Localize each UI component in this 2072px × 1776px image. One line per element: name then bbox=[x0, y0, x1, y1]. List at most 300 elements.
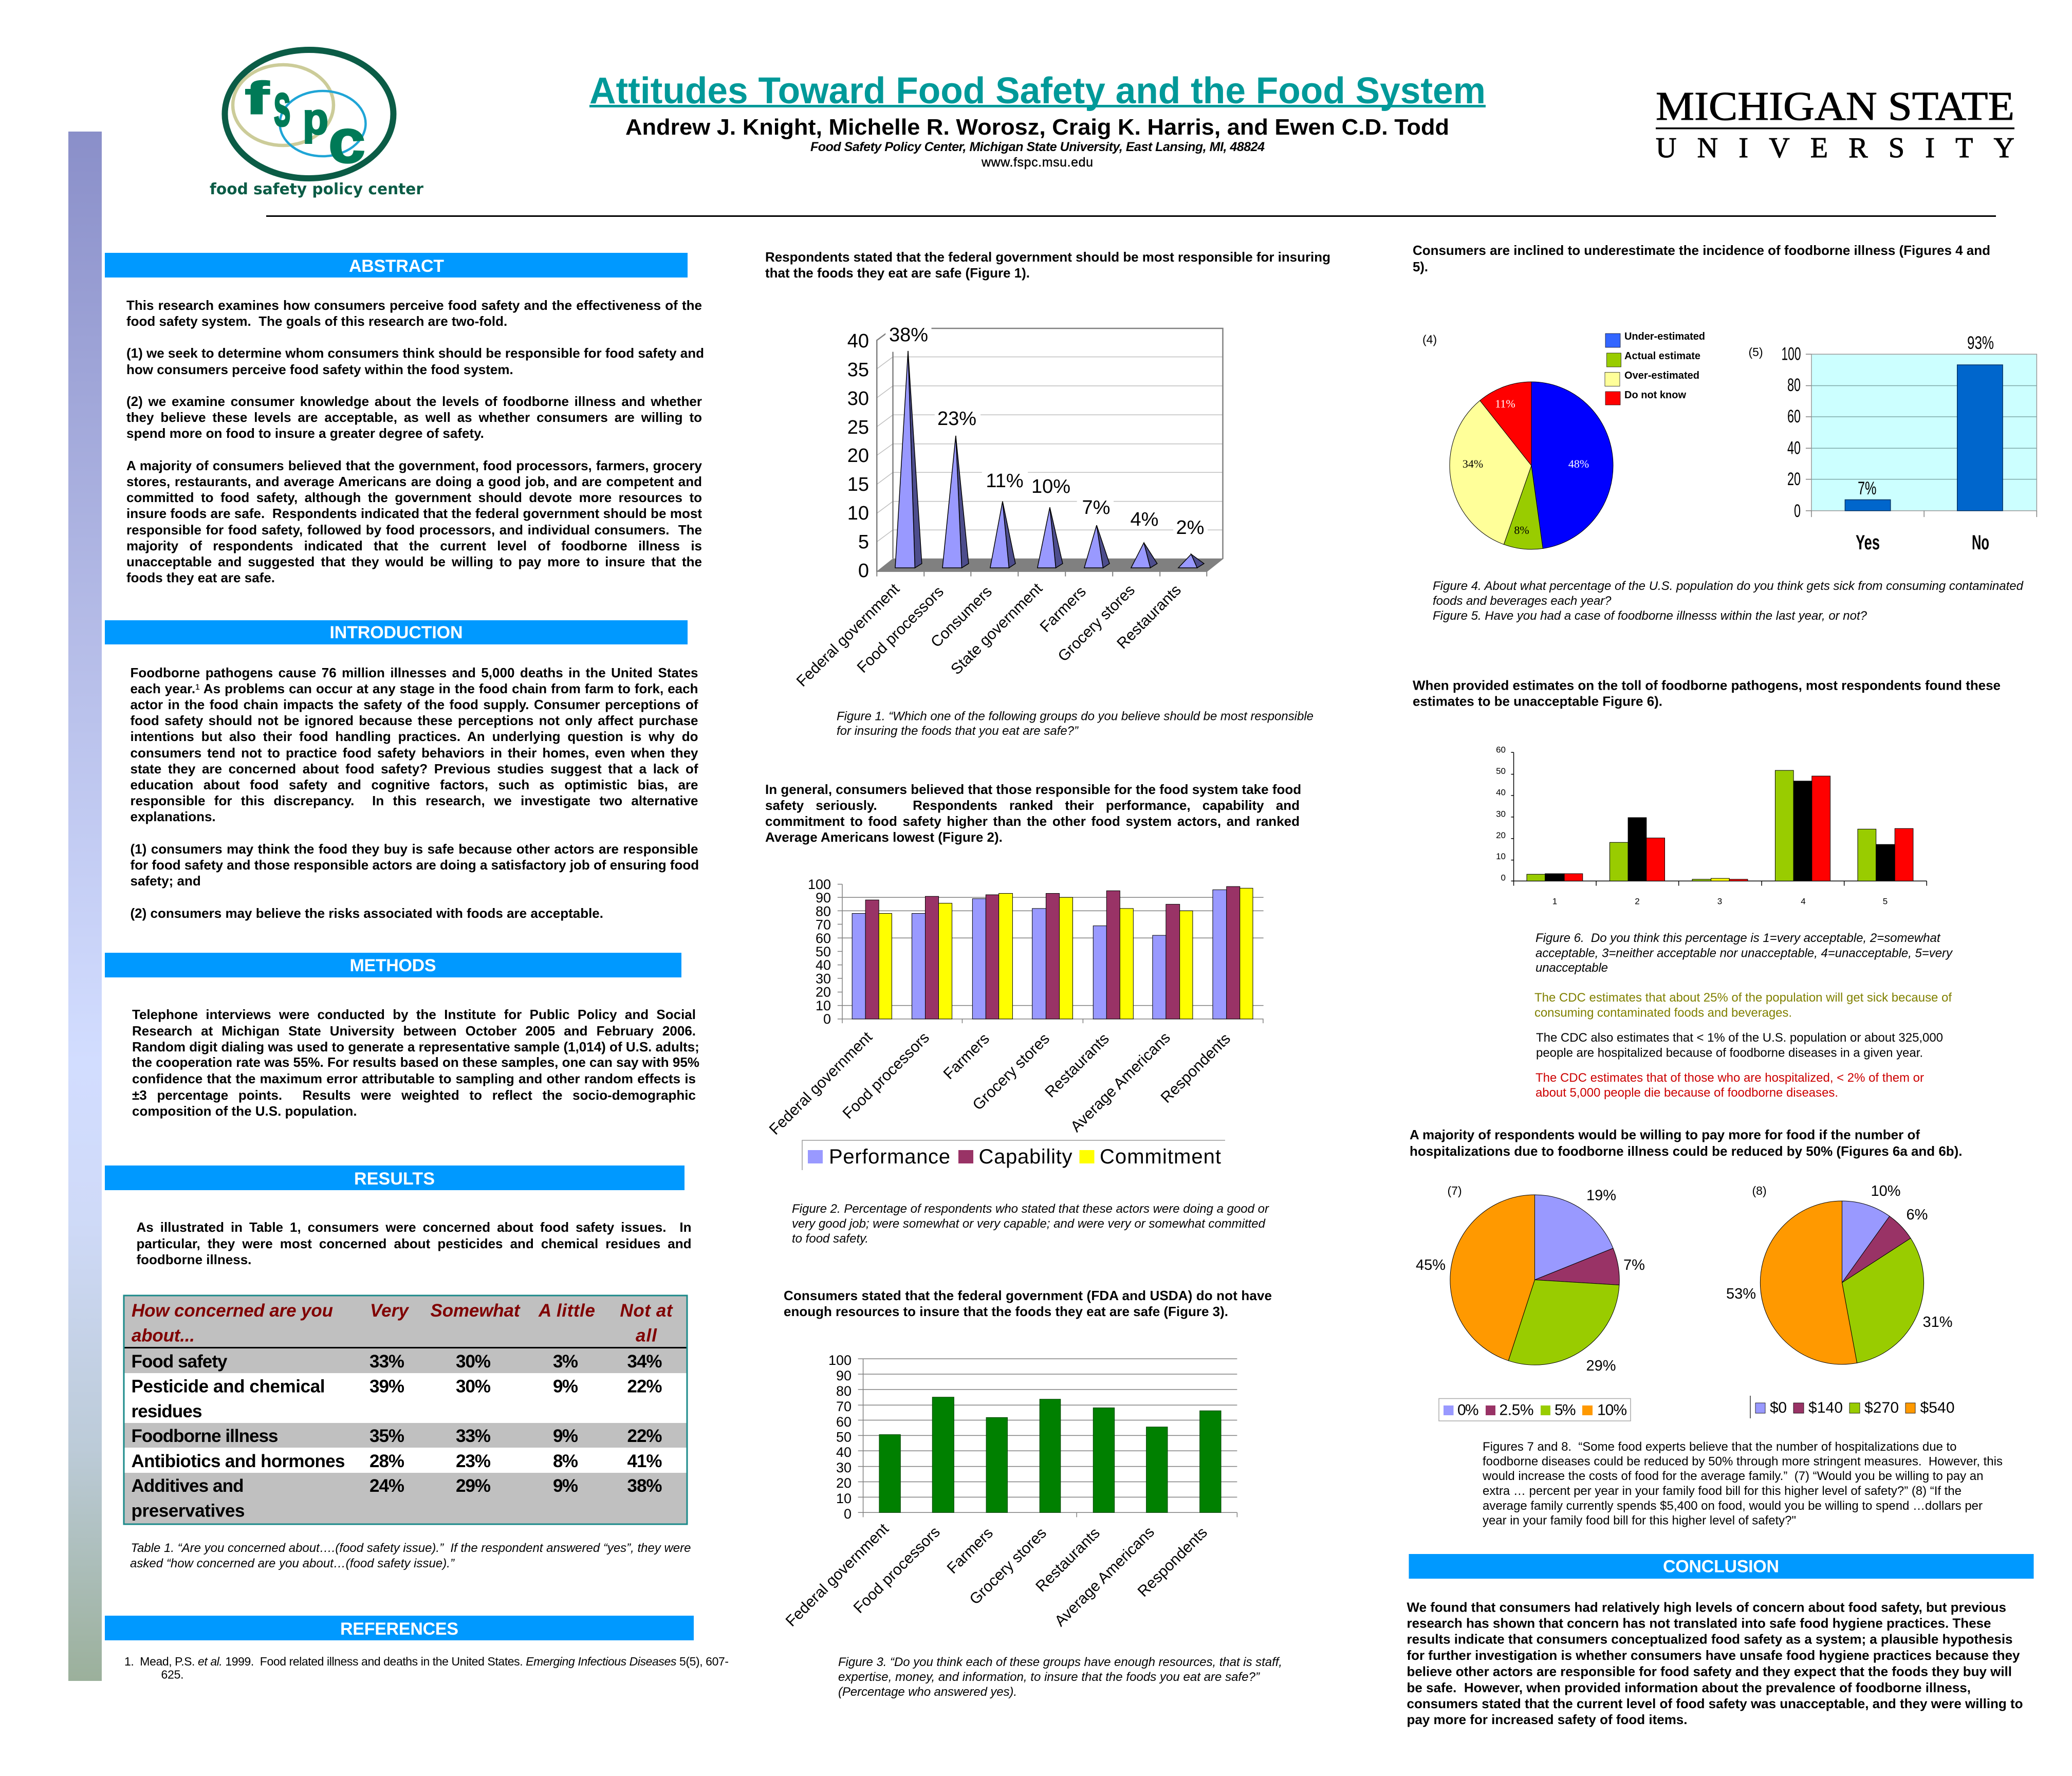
heading: introduction: INTRODUCTION bbox=[330, 623, 462, 642]
heading: figure 3 statement: Consumers stated that the federal government (FDA and USDA) do not have bbox=[784, 1288, 1272, 1303]
text block: abstract body: food safety system. The goals of this research are two-fold. bbox=[126, 313, 507, 329]
chart: figure 4 pie: 34% bbox=[1463, 457, 1483, 470]
chart: figure 4 pie bbox=[1422, 331, 1705, 549]
chart: figure 6 bars: 10 bbox=[1496, 852, 1506, 861]
text block: results intro: As illustrated in Table 1, consumers were concerned about food safety issues. In bbox=[137, 1219, 692, 1234]
legend: figure 8: $270 bbox=[1864, 1399, 1899, 1416]
heading: results: RESULTS bbox=[354, 1169, 435, 1189]
chart: figure 4 pie: 11% bbox=[1495, 397, 1515, 410]
table 1: 35% bbox=[369, 1426, 404, 1446]
caption: figure 3: expertise, money, and information, to insure that the foods you eat are safe?” bbox=[838, 1670, 1260, 1684]
text block: abstract body: (1) we seek to determine whom consumers think should be responsible for food safety and bbox=[126, 345, 704, 361]
text block: introduction body: explanations. bbox=[131, 809, 216, 824]
chart: figure 3 bars: Restaurants bbox=[1032, 1525, 1103, 1595]
table 1: Antibiotics and hormones bbox=[132, 1451, 345, 1471]
chart: figure 5 bars: No bbox=[1972, 531, 1989, 554]
chart: figure 1 pyramid chart: 5 bbox=[858, 531, 869, 553]
chart: figure 7 pie: 7% bbox=[1623, 1257, 1645, 1273]
chart: figure 8 pie: 6% bbox=[1907, 1207, 1928, 1223]
table 1: 33% bbox=[369, 1352, 404, 1372]
table 1: Food safety bbox=[132, 1352, 228, 1372]
text block: introduction body: education about food safety and cognitive factors, such as optimistic bias, are bbox=[131, 777, 698, 792]
text block: introduction body: (2) consumers may believe the risks associated with foods are acceptable. bbox=[131, 905, 603, 921]
legend: figure 8: $0 bbox=[1770, 1399, 1787, 1416]
chart: figure 2 grouped bars: 60 bbox=[816, 931, 831, 946]
text block: conclusion body: be safe. However, when provided information about the prevalence of foodborne illness, bbox=[1407, 1680, 1971, 1695]
table 1: 22% bbox=[627, 1376, 662, 1397]
legend: figure 7: 2.5% bbox=[1500, 1402, 1533, 1418]
text block: CDC estimates: people are hospitalized because of foodborne diseases in a given year. bbox=[1536, 1046, 1923, 1060]
chart: figure 3 bars: 100 bbox=[828, 1353, 852, 1368]
table 1: 24% bbox=[369, 1476, 404, 1496]
chart: figure 5 bars: 80 bbox=[1787, 375, 1801, 395]
chart: figure 3 bars: 70 bbox=[836, 1399, 852, 1414]
logo: food safety policy center bbox=[210, 50, 423, 198]
table 1: 38% bbox=[627, 1476, 662, 1496]
text block: results intro bbox=[137, 1219, 692, 1267]
chart: figure 2 grouped bars: 40 bbox=[816, 957, 831, 973]
table 1: 30% bbox=[456, 1352, 491, 1372]
title block: Attitudes Toward Food Safety and the Food System bbox=[589, 70, 1486, 112]
chart: figure 1 pyramid chart: 38% bbox=[889, 324, 928, 346]
caption: figures 7 and 8 bbox=[1482, 1440, 2003, 1527]
legend: figure 4: Do not know bbox=[1624, 390, 1686, 401]
heading: figures 4 and 5 statement bbox=[1413, 243, 1990, 274]
table 1: residues bbox=[132, 1401, 202, 1421]
table 1: 8% bbox=[553, 1451, 578, 1471]
heading: conclusion bbox=[1409, 1554, 2034, 1579]
heading: figure 1 statement bbox=[765, 249, 1330, 281]
chart: figure 6 bars: 60 bbox=[1496, 745, 1506, 754]
legend: figure 4: Over-estimated bbox=[1624, 370, 1699, 381]
legend: figure 4: Under-estimated bbox=[1624, 331, 1705, 342]
table 1: 33% bbox=[456, 1426, 491, 1446]
chart: figure 2 grouped bars: Respondents bbox=[1158, 1030, 1234, 1106]
chart: figure 5 bars: 93% bbox=[1967, 333, 1994, 353]
chart: figure 8 pie: (8) bbox=[1752, 1184, 1767, 1197]
text block: introduction body: food safety should not be ignored because these perceptions not only affect purchase bbox=[131, 712, 698, 728]
chart: figure 5 bars: 0 bbox=[1794, 501, 1801, 521]
text block: abstract body: how consumers perceive food safety within the food system. bbox=[126, 362, 513, 377]
heading: figure 6 statement bbox=[1413, 677, 2001, 709]
table 1: Pesticide and chemical bbox=[132, 1376, 325, 1397]
chart: figure 3 bars: 60 bbox=[836, 1414, 852, 1430]
table 1: 23% bbox=[456, 1451, 491, 1471]
table 1: Additives and bbox=[132, 1476, 244, 1496]
chart: figure 2 grouped bars: 90 bbox=[816, 890, 831, 905]
chart: figure 2 grouped bars bbox=[766, 877, 1264, 1170]
chart: figure 7 pie: (7) bbox=[1447, 1184, 1462, 1197]
table 1: 9% bbox=[553, 1426, 578, 1446]
chart: figure 2 grouped bars: 30 bbox=[816, 971, 831, 987]
chart: figure 5 bars: 60 bbox=[1787, 406, 1801, 427]
text block: abstract body: they believe these levels are acceptable, as well as whether consumers are willing to bbox=[126, 410, 702, 425]
caption: figures 7 and 8: average family currently spends $5,400 on food, would you be willing to spend …dollars per bbox=[1483, 1499, 1983, 1513]
text block: results intro: particular, they were most concerned about pesticides and chemical residues and bbox=[137, 1235, 692, 1251]
logo: food safety policy center: food safety policy center bbox=[210, 180, 423, 198]
chart: figure 1 pyramid chart: 0 bbox=[858, 560, 869, 582]
heading: abstract: ABSTRACT bbox=[349, 256, 444, 276]
chart: figure 3 bars: Food processors bbox=[850, 1524, 943, 1617]
caption: figure 2: very good job; were somewhat or very capable; and were very or somewhat committed bbox=[792, 1217, 1266, 1231]
chart: figure 6 bars: 4 bbox=[1801, 896, 1806, 906]
heading: figure 1 statement: Respondents stated that the federal government should be most responsible for insuring bbox=[765, 249, 1330, 265]
heading: figure 3 statement: enough resources to insure that the foods they eat are safe (Figure 3). bbox=[784, 1304, 1228, 1319]
text block: conclusion body bbox=[1407, 1599, 2023, 1727]
text block: CDC estimates: The CDC also estimates that < 1% of the U.S. population or about 325,000 bbox=[1536, 1031, 1943, 1045]
chart: figure 6 bars: 50 bbox=[1496, 766, 1506, 776]
logo: Michigan State University: MICHIGAN STATE bbox=[1656, 84, 2014, 129]
chart: figure 1 pyramid chart: 10% bbox=[1031, 476, 1070, 497]
heading: figures 4 and 5 statement: Consumers are inclined to underestimate the incidence of foodborne illness (Figures 4 and bbox=[1413, 243, 1990, 258]
title block bbox=[589, 70, 1486, 170]
heading: figure 3 statement bbox=[784, 1288, 1272, 1319]
chart: figure 6 bars: 2 bbox=[1635, 896, 1640, 906]
chart: figure 4 pie: (4) bbox=[1422, 333, 1437, 346]
heading: figure 2 statement: commitment to food safety higher than the other food system actors, and ranked bbox=[765, 813, 1300, 828]
chart: figure 6 bars bbox=[1496, 745, 1927, 906]
chart: figure 1 pyramid chart: 30 bbox=[847, 388, 869, 410]
text block: introduction body: Foodborne pathogens cause 76 million illnesses and 5,000 deaths in the United States bbox=[131, 665, 698, 680]
table 1 bbox=[124, 1296, 687, 1524]
chart: figure 3 bars: 10 bbox=[836, 1491, 852, 1506]
chart: figure 5 bars: Yes bbox=[1856, 531, 1880, 554]
text block: abstract body: insure foods are safe. Respondents indicated that the federal government should be most bbox=[126, 506, 702, 521]
chart: figure 6 bars: 5 bbox=[1883, 896, 1888, 906]
chart: figure 5 bars: 7% bbox=[1858, 478, 1877, 498]
table 1: A little bbox=[538, 1301, 595, 1321]
text block: introduction body: actor in the food chain impacts the safety of the food supply. Consumer perceptions of bbox=[131, 697, 698, 712]
decorative gradient sidebar bbox=[68, 132, 102, 1681]
chart: figure 2 grouped bars: Federal government bbox=[766, 1028, 876, 1138]
chart: figure 6 bars: 0 bbox=[1501, 873, 1506, 883]
chart: figure 1 pyramid chart: 4% bbox=[1131, 509, 1158, 530]
text block: conclusion body: for further investigation is whether consumers have unsafe food hygiene practices because they bbox=[1407, 1648, 2020, 1663]
text block: abstract body: A majority of consumers believed that the government, food processors, farmers, grocery bbox=[126, 457, 702, 473]
text block: abstract body: foods they eat are safe. bbox=[126, 569, 275, 585]
caption: figures 4 and 5: Figure 5. Have you had a case of foodborne illnesss within the last year, or not? bbox=[1433, 609, 1867, 623]
table 1: Not at bbox=[620, 1301, 673, 1321]
table 1: Foodborne illness bbox=[132, 1426, 279, 1446]
text block: CDC estimates bbox=[1534, 991, 1952, 1100]
chart: figure 4 pie: 48% bbox=[1568, 457, 1589, 470]
title block: Food Safety Policy Center, Michigan State University, East Lansing, MI, 48824 bbox=[810, 140, 1265, 154]
caption: figures 4 and 5: Figure 4. About what percentage of the U.S. population do you think gets sick from consuming contaminated bbox=[1433, 579, 2024, 593]
text block: methods body: Telephone interviews were conducted by the Institute for Public Policy and Social bbox=[132, 1007, 696, 1022]
chart: figure 1 pyramid chart: 23% bbox=[937, 408, 976, 430]
table 1: preservatives bbox=[132, 1501, 245, 1521]
text block: abstract body: responsible for food safety, followed by food processors, and individual consumers. The bbox=[126, 522, 702, 538]
chart: figure 5 bars: (5) bbox=[1748, 345, 1763, 359]
chart: figure 2 grouped bars: Grocery stores bbox=[970, 1030, 1053, 1114]
heading: results bbox=[105, 1166, 684, 1190]
table 1: How concerned are you bbox=[132, 1301, 333, 1321]
heading: introduction bbox=[105, 620, 688, 644]
chart: figure 3 bars: Federal government bbox=[783, 1520, 892, 1630]
legend: figure 4 bbox=[1605, 331, 1705, 405]
heading: methods: METHODS bbox=[349, 956, 436, 975]
text block: introduction body: safety; and bbox=[131, 873, 201, 888]
chart: figure 3 bars: 80 bbox=[836, 1383, 852, 1399]
text block: introduction body: state they are concerned about food safety? Previous studies suggest that a lack of bbox=[131, 761, 698, 776]
text block: introduction body: responsible for this discrepancy. In this research, we investigate two alternative bbox=[131, 792, 698, 808]
chart: figure 1 pyramid chart: 11% bbox=[986, 470, 1024, 492]
table 1: Very bbox=[370, 1301, 410, 1321]
panel: abstract bbox=[105, 253, 702, 586]
chart: figure 1 pyramid chart: 25 bbox=[847, 417, 869, 438]
caption: figures 7 and 8: extra … percent per year in your family food bill for this higher level of safety?” (8) “If the bbox=[1483, 1484, 1962, 1498]
caption: figure 2 bbox=[792, 1202, 1269, 1246]
legend: figure 8: $140 bbox=[1808, 1399, 1843, 1416]
text block: results intro: foodborne illness. bbox=[137, 1252, 251, 1267]
text block: reference list: 1. Mead, P.S. et al. 1999. Food related illness and deaths in the United States. Emerging Infectious Diseases 5(5), 607- bbox=[124, 1655, 729, 1668]
chart: figure 6 bars: 20 bbox=[1496, 830, 1506, 840]
text block: methods body: Research at Michigan State University between October 2005 and February 2006. bbox=[132, 1023, 696, 1038]
chart: figure 7 pie: 45% bbox=[1416, 1257, 1446, 1273]
caption: figure 3 bbox=[838, 1655, 1282, 1699]
text block: CDC estimates: The CDC estimates that of those who are hospitalized, < 2% of them or bbox=[1535, 1071, 1924, 1085]
caption: figures 7 and 8: Figures 7 and 8. “Some food experts believe that the number of hospitalizations due to bbox=[1483, 1440, 1957, 1454]
text block: methods body: confidence that the maximum error attributable to sampling and other random effects is bbox=[132, 1071, 696, 1086]
chart: figure 7 pie: 19% bbox=[1586, 1187, 1616, 1204]
chart: figure 5 bars: 20 bbox=[1787, 469, 1801, 489]
text block: introduction body: for food safety and those responsible actors are doing a satisfactory job of ensuring food bbox=[131, 857, 699, 873]
caption: figures 4 and 5 bbox=[1433, 579, 2024, 623]
panel: introduction bbox=[105, 620, 698, 921]
table 1: 41% bbox=[627, 1451, 662, 1471]
chart: figure 5 bars bbox=[1748, 333, 2037, 554]
legend: figure 2: Capability bbox=[978, 1145, 1072, 1168]
chart: figure 2 grouped bars: 10 bbox=[816, 998, 831, 1013]
chart: figure 2 grouped bars: Food processors bbox=[840, 1029, 933, 1122]
text block: introduction body: (1) consumers may think the food they buy is safe because other actors are responsible bbox=[131, 841, 698, 856]
legend: figure 8: $540 bbox=[1920, 1399, 1955, 1416]
text block: reference list bbox=[124, 1655, 729, 1681]
text block: abstract body: stores, restaurants, and average Americans are doing a good job, and are competent and bbox=[126, 474, 702, 489]
heading: figure 6 statement: When provided estimates on the toll of foodborne pathogens, most respondents found these bbox=[1413, 677, 2001, 693]
legend: figure 2: Performance bbox=[829, 1145, 950, 1168]
text block: abstract body: committed to food safety, although the government should devote more resources to bbox=[126, 489, 702, 505]
caption: figures 4 and 5: foods and beverages each year? bbox=[1433, 594, 1612, 608]
chart: figure 1 pyramid chart: Consumers bbox=[928, 583, 995, 651]
legend: figure 7: 0% bbox=[1457, 1402, 1479, 1418]
text block: methods body: composition of the U.S. population. bbox=[132, 1103, 357, 1118]
table caption: Table 1. “Are you concerned about….(food safety issue).” If the respondent answered “yes”, they were bbox=[131, 1541, 691, 1555]
table caption bbox=[130, 1541, 691, 1570]
chart: figure 1 pyramid chart: Restaurants bbox=[1114, 582, 1185, 652]
chart: figure 2 grouped bars: 70 bbox=[816, 917, 831, 932]
chart: figure 2 grouped bars: 50 bbox=[816, 944, 831, 959]
logo: food safety policy center: f bbox=[245, 72, 269, 123]
text block: introduction body: each year.¹ As problems can occur at any stage in the food chain from farm to fork, each bbox=[131, 680, 698, 696]
table 1: 9% bbox=[553, 1376, 578, 1397]
heading: abstract bbox=[105, 253, 688, 278]
table 1: 30% bbox=[456, 1376, 491, 1397]
chart: figure 8 pie bbox=[1726, 1183, 1955, 1418]
heading: figure 2 statement bbox=[765, 781, 1300, 845]
heading: conclusion: CONCLUSION bbox=[1663, 1557, 1779, 1577]
text block: conclusion body: believe other actors are responsible for food safety and they expect that the foods they buy will bbox=[1407, 1664, 2012, 1679]
chart: figure 4 pie: 8% bbox=[1514, 524, 1529, 536]
chart: figure 7 pie: 29% bbox=[1586, 1358, 1616, 1374]
table 1: 29% bbox=[456, 1476, 491, 1496]
chart: figure 1 pyramid chart: 40 bbox=[847, 330, 869, 352]
chart: figure 6 bars: 30 bbox=[1496, 809, 1506, 819]
legend: figure 7: 10% bbox=[1597, 1402, 1627, 1418]
heading: figure 1 statement: that the foods they eat are safe (Figure 1). bbox=[765, 265, 1030, 281]
chart: figure 3 bars: 40 bbox=[836, 1445, 852, 1460]
heading: figure 2 statement: Average Americans lowest (Figure 2). bbox=[765, 829, 1003, 845]
chart: figure 3 bars bbox=[783, 1353, 1237, 1630]
text block: conclusion body: results indicate that consumers conceptualized food safety as a system; a plausible hypothesis bbox=[1407, 1631, 2012, 1646]
text block: introduction body bbox=[131, 665, 698, 921]
text block: introduction body: consumers tend not to practice food safety behaviors in their homes, even when they bbox=[131, 745, 698, 761]
text block: abstract body: (2) we examine consumer knowledge about the levels of foodborne illness and whether bbox=[126, 394, 702, 409]
chart: figure 1 pyramid chart: 10 bbox=[847, 503, 869, 524]
logo: food safety policy center: s bbox=[273, 71, 291, 139]
caption: figures 7 and 8: foodborne diseases could be reduced by 50% through more stringent measures. However, this bbox=[1483, 1454, 2003, 1469]
table 1: 22% bbox=[627, 1426, 662, 1446]
table 1: 34% bbox=[627, 1352, 662, 1372]
text block: abstract body bbox=[126, 297, 702, 586]
chart: figure 2 grouped bars: 100 bbox=[808, 877, 831, 892]
chart: figure 2 grouped bars: Farmers bbox=[940, 1030, 993, 1083]
chart: figure 3 bars: 50 bbox=[836, 1430, 852, 1445]
logo: food safety policy center: c bbox=[328, 107, 365, 176]
chart: figure 8 pie: 53% bbox=[1726, 1286, 1756, 1302]
chart: figure 1 pyramid chart: 20 bbox=[847, 445, 869, 467]
logo: Michigan State University bbox=[1656, 84, 2014, 164]
logo: Michigan State University: UNIVERSITY bbox=[1656, 132, 2014, 164]
logo: food safety policy center: p bbox=[303, 95, 328, 144]
legend: figure 8 bbox=[1750, 1396, 1955, 1418]
caption: figure 3: (Percentage who answered yes). bbox=[838, 1685, 1017, 1699]
heading: references bbox=[105, 1616, 694, 1640]
chart: figure 2 grouped bars: Average Americans bbox=[1067, 1029, 1174, 1136]
text block: methods body: Random digit dialing was used to generate a representative sample (1,014) of U.S. adults; bbox=[132, 1039, 699, 1054]
title block: Andrew J. Knight, Michelle R. Worosz, Craig K. Harris, and Ewen C.D. Todd bbox=[625, 115, 1449, 140]
chart: figure 1 pyramid chart: 2% bbox=[1176, 517, 1204, 539]
chart: figure 1 pyramid chart: Farmers bbox=[1037, 583, 1089, 636]
caption: figure 1 bbox=[837, 709, 1313, 738]
text block: conclusion body: consumers stated that the current level of food safety was unacceptable, and they were willing to bbox=[1407, 1696, 2023, 1711]
chart: figure 3 bars: 0 bbox=[844, 1506, 852, 1522]
caption: figure 2: to food safety. bbox=[792, 1232, 868, 1246]
table 1: 9% bbox=[553, 1476, 578, 1496]
heading: figures 4 and 5 statement: 5). bbox=[1413, 259, 1428, 274]
panel: results bbox=[105, 1166, 692, 1570]
text block: abstract body: majority of respondents indicated that the current level of foodborne illness is bbox=[126, 538, 702, 553]
heading: references: REFERENCES bbox=[340, 1619, 458, 1639]
chart: figure 3 bars: 20 bbox=[836, 1475, 852, 1491]
chart: figure 3 bars: Respondents bbox=[1135, 1524, 1211, 1600]
text block: abstract body: unacceptable and suggested that they would be willing to pay more to insure that the bbox=[126, 554, 702, 569]
text block: abstract body: This research examines how consumers perceive food safety and the effectiveness of the bbox=[126, 297, 702, 312]
chart: figure 1 pyramid chart: Grocery stores bbox=[1055, 582, 1138, 665]
legend: figure 2: Commitment bbox=[1100, 1145, 1221, 1168]
chart: figure 5 bars: 100 bbox=[1781, 344, 1801, 364]
chart: figure 3 bars: 30 bbox=[836, 1460, 852, 1475]
chart: figure 6 bars: 40 bbox=[1496, 787, 1506, 798]
text block: conclusion body: We found that consumers had relatively high levels of concern about food safety, but previous bbox=[1407, 1599, 2006, 1615]
caption: figure 6: acceptable, 3=neither acceptable nor unacceptable, 4=unacceptable, 5=very bbox=[1535, 947, 1953, 960]
table caption: asked “how concerned are you about…(food safety issue).” bbox=[130, 1557, 455, 1570]
chart: figure 6 bars: 1 bbox=[1552, 896, 1557, 906]
heading: figure 2 statement: In general, consumers believed that those responsible for the food system take food bbox=[765, 781, 1301, 797]
text block: conclusion body: research has shown that concern has not translated into safe food hygiene practices. These bbox=[1407, 1616, 1991, 1631]
heading: methods bbox=[105, 953, 681, 977]
table 1: 28% bbox=[369, 1451, 404, 1471]
legend: figure 2 bbox=[802, 1140, 1225, 1170]
chart: figure 1 pyramid chart: 7% bbox=[1082, 497, 1110, 519]
chart: figure 5 bars: 40 bbox=[1787, 438, 1801, 458]
text block: abstract body: spend more on food to insure a greater degree of safety. bbox=[126, 425, 484, 441]
text block: CDC estimates: The CDC estimates that about 25% of the population will get sick because of bbox=[1534, 991, 1952, 1005]
chart: figure 3 bars: Grocery stores bbox=[967, 1525, 1050, 1608]
table 1: 39% bbox=[369, 1376, 404, 1397]
chart: figure 7 pie bbox=[1416, 1184, 1645, 1421]
caption: figure 1: Figure 1. “Which one of the following groups do you believe should be most responsible bbox=[837, 709, 1313, 724]
chart: figure 6 bars: 3 bbox=[1717, 896, 1722, 906]
text block: CDC estimates: consuming contaminated foods and beverages. bbox=[1534, 1006, 1792, 1020]
heading: figures 7 and 8 statement: A majority of respondents would be willing to pay more for food if the number of bbox=[1410, 1127, 1920, 1142]
caption: figure 2: Figure 2. Percentage of respondents who stated that these actors were doing a good or bbox=[792, 1202, 1269, 1216]
heading: figures 7 and 8 statement bbox=[1410, 1127, 1962, 1159]
chart: figure 8 pie: 31% bbox=[1922, 1314, 1953, 1330]
table 1: Somewhat bbox=[431, 1301, 521, 1321]
title block: www.fspc.msu.edu bbox=[981, 155, 1093, 170]
chart: figure 1 pyramid chart: State government bbox=[948, 580, 1046, 678]
text block: conclusion body: pay more for increased safety of food items. bbox=[1407, 1712, 1688, 1727]
chart: figure 8 pie: 10% bbox=[1871, 1183, 1901, 1199]
text block: reference list: 625. bbox=[161, 1668, 184, 1681]
table 1: about... bbox=[132, 1326, 195, 1345]
panel: methods bbox=[105, 953, 696, 1119]
chart: figure 1 pyramid chart bbox=[793, 324, 1223, 690]
legend: figure 7 bbox=[1439, 1399, 1631, 1421]
text block: methods body: ±3 percentage points. Results were weighted to reflect the socio-demographic bbox=[132, 1087, 696, 1103]
legend: figure 4: Actual estimate bbox=[1624, 350, 1700, 362]
chart: figure 1 pyramid chart: 15 bbox=[847, 474, 869, 495]
table 1: all bbox=[636, 1326, 657, 1345]
caption: figure 3: Figure 3. “Do you think each of these groups have enough resources, that is staff, bbox=[838, 1655, 1282, 1669]
chart: figure 3 bars: Farmers bbox=[944, 1525, 996, 1577]
caption: figure 6: Figure 6. Do you think this percentage is 1=very acceptable, 2=somewhat bbox=[1535, 931, 1941, 945]
text block: methods body bbox=[132, 1007, 696, 1119]
panel: references bbox=[105, 1616, 729, 1681]
heading: figure 6 statement: estimates to be unacceptable Figure 6). bbox=[1413, 694, 1662, 709]
chart: figure 1 pyramid chart: Food processors bbox=[854, 583, 947, 676]
chart: figure 3 bars: 90 bbox=[836, 1368, 852, 1383]
caption: figures 7 and 8: year in your family food bill for this higher level of safety?" bbox=[1483, 1514, 1796, 1527]
heading: figures 7 and 8 statement: hospitalizations due to foodborne illness could be reduced by 50% (Figures 6a and 6b). bbox=[1410, 1143, 1962, 1159]
table 1: 3% bbox=[553, 1352, 578, 1372]
text block: methods body: the cooperation rate was 55%. For results based on these samples, one can say with 95% bbox=[132, 1054, 699, 1070]
chart: figure 2 grouped bars: Restaurants bbox=[1042, 1030, 1113, 1101]
chart: figure 1 pyramid chart: Federal government bbox=[793, 580, 903, 690]
caption: figure 6 bbox=[1535, 931, 1953, 975]
chart: figure 2 grouped bars: 0 bbox=[823, 1011, 831, 1027]
caption: figures 7 and 8: would increase the costs of food for the average family.” (7) “Would you be willing to pay an bbox=[1482, 1469, 1984, 1483]
heading: figure 2 statement: safety seriously. Respondents ranked their performance, capability and bbox=[765, 798, 1300, 813]
text block: CDC estimates: about 5,000 people die because of foodborne diseases. bbox=[1535, 1086, 1838, 1100]
text block: introduction body: intentions but also their food handling practices. An underlying question is why do bbox=[131, 729, 698, 744]
chart: figure 2 grouped bars: 20 bbox=[816, 985, 831, 1000]
caption: figure 6: unacceptable bbox=[1535, 961, 1608, 975]
panel: conclusion bbox=[1407, 1554, 2034, 1727]
legend: figure 7: 5% bbox=[1555, 1402, 1576, 1418]
caption: figure 1: for insuring the foods that you eat are safe?” bbox=[837, 724, 1079, 738]
